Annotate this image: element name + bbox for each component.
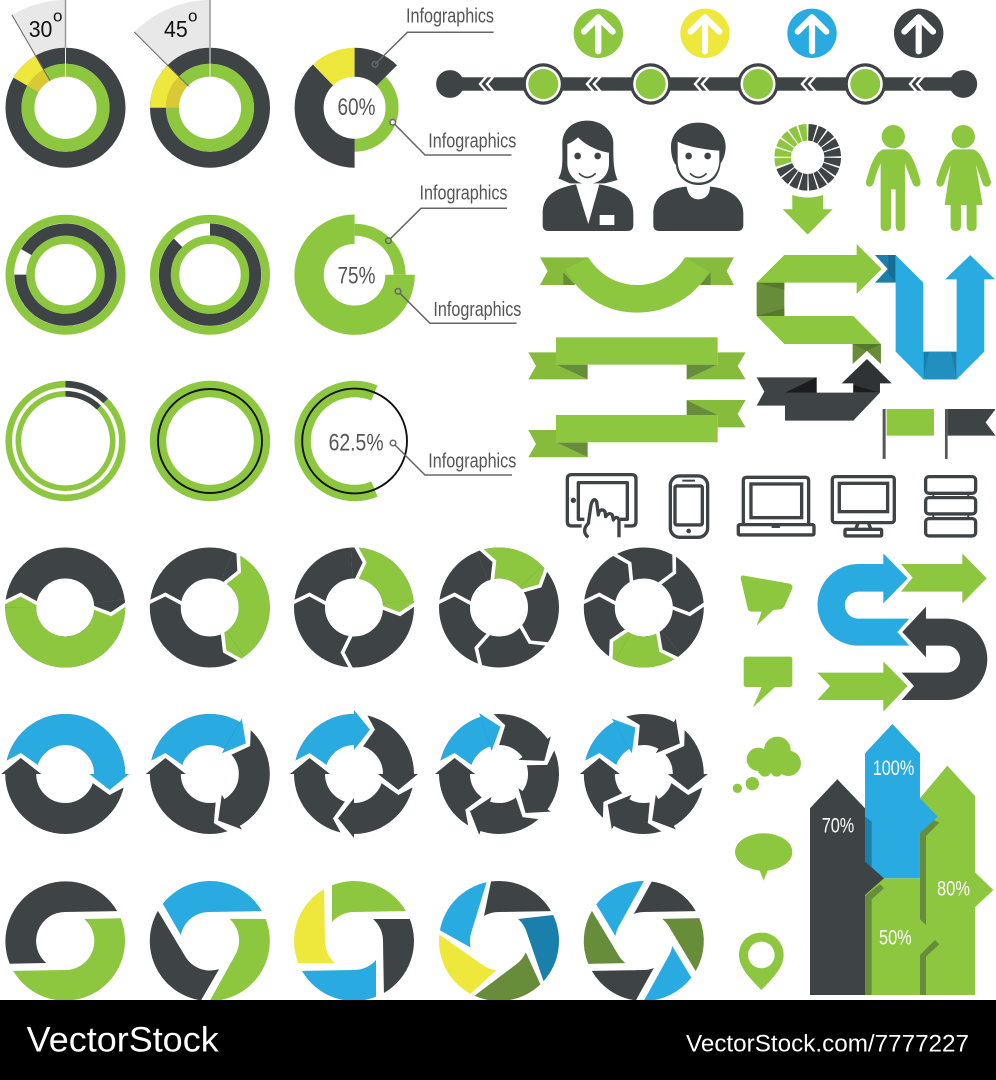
- donut gauge: 45 degrees: [134, 0, 262, 160]
- arrow cycle: 4 segments blue: [290, 710, 418, 838]
- icon: smartphone: [670, 476, 708, 537]
- cycle diagram: 2 segments green: [2, 557, 129, 658]
- arrow cycle: 2 segments blue: [1, 730, 129, 818]
- donut gauge: 45 degrees: o: [188, 7, 197, 26]
- folded dark arrow: [757, 359, 892, 421]
- cycle diagram: 4 segments green: [291, 544, 418, 671]
- curved ribbon: [540, 257, 734, 313]
- arrow cycle: 5 segments blue: [435, 707, 563, 835]
- footer bar: VectorStock.com/7777227: [686, 1031, 969, 1058]
- S-shaped flow arrows: [817, 553, 987, 712]
- pie chart: 75% with labels: Infographics: [420, 182, 508, 204]
- donut gauge: 30 degrees: o: [53, 7, 62, 26]
- folded green S arrow: [757, 244, 882, 364]
- folded blue U arrow: [875, 255, 995, 379]
- timeline with nodes: [436, 63, 977, 105]
- shutter ring: 3 blades: [132, 881, 285, 1016]
- icon: dark flag: [945, 409, 996, 459]
- arrow bar chart: 80%: [937, 878, 970, 901]
- ring chart: 62.5% with label: [287, 373, 516, 509]
- pie chart: 60% with labels: Infographics: [428, 131, 516, 153]
- cycle diagram: 5 segments green: [436, 544, 557, 668]
- segmented donut gauge: [777, 126, 839, 188]
- icon: man: [653, 123, 743, 231]
- pie chart: 60% with labels: Infographics: [406, 6, 494, 28]
- icon: yellow up arrow: [680, 9, 730, 58]
- ring with black circle: [158, 389, 262, 493]
- shutter ring: 4 blades: [294, 881, 414, 1001]
- icon: tablet with touch hand: [567, 475, 636, 537]
- icon: server stack: [926, 477, 976, 536]
- arrow bar chart: [810, 724, 993, 995]
- icon: businesswoman: [543, 121, 633, 231]
- shutter ring: 6 blades: [566, 866, 721, 1016]
- icon: laptop: [738, 477, 814, 535]
- icon: dark up arrow: [894, 9, 943, 58]
- straight ribbon 2: [528, 400, 746, 457]
- arrow cycle: 3 segments blue: [146, 719, 260, 840]
- ring chart: 62.5% with label: Infographics: [428, 451, 516, 473]
- shutter ring: 5 blades: [422, 873, 572, 1020]
- footer bar: [0, 1000, 996, 1080]
- thin ring with dark arc: [9, 384, 122, 498]
- callout: oval speech bubble: [735, 833, 792, 881]
- arrow bar chart: 100%: [873, 757, 914, 780]
- arrow cycle: 6 segments blue: [580, 708, 708, 840]
- icon: desktop monitor: [832, 477, 894, 536]
- ring chart: 62.5% with label: 62.5%: [329, 430, 384, 457]
- footer bar: VectorStock: [27, 1021, 219, 1060]
- callout: rectangular speech bubble: [744, 657, 792, 707]
- arrow bar chart: 70%: [822, 814, 854, 837]
- pie chart: 75% with labels: [309, 182, 521, 323]
- donut gauge: 45 degrees: 45: [164, 16, 188, 42]
- double ring 1: [4, 213, 127, 336]
- straight ribbon 1: [528, 337, 746, 379]
- icon: blue up arrow: [787, 9, 837, 58]
- donut gauge: 30 degrees: 30: [29, 16, 52, 42]
- shutter ring: 2 blades: [5, 881, 125, 1001]
- callout: slanted speech bubble: [741, 576, 792, 626]
- cycle diagram: 3 segments green: [147, 549, 268, 667]
- icon: green up arrow: [574, 9, 623, 58]
- pie chart: 60% with labels: [290, 6, 516, 172]
- pie chart: 75% with labels: Infographics: [433, 299, 521, 321]
- arrow bar chart: 50%: [879, 926, 912, 949]
- icon: male figure: [866, 125, 921, 231]
- icon: map pin: [739, 933, 784, 990]
- double ring 2: [154, 219, 266, 330]
- icon: female figure: [936, 125, 991, 231]
- callout: thought cloud: [733, 737, 801, 793]
- icon: green flag: [883, 409, 934, 459]
- cycle diagram: 6 segments green: [581, 545, 708, 670]
- icon: down arrow: [783, 195, 833, 235]
- donut gauge: 30 degrees: [0, 0, 137, 179]
- pie chart: 75% with labels: 75%: [338, 262, 376, 289]
- pie chart: 60% with labels: 60%: [338, 94, 376, 121]
